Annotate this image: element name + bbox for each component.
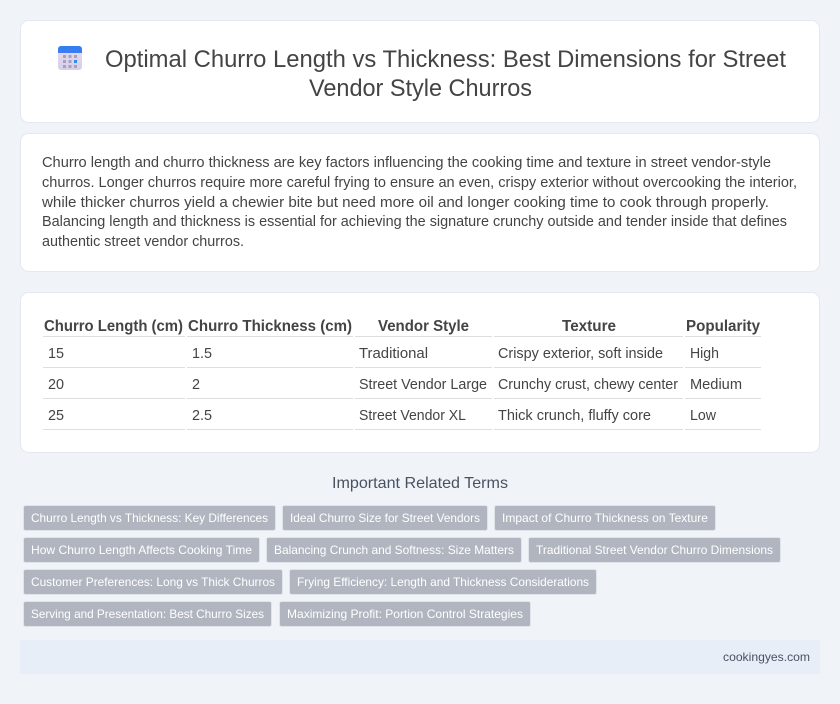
table row: 20 cm: 20 xyxy=(48,377,64,393)
table row: 15 cm: Crispy exterior, soft inside xyxy=(498,346,663,362)
tag list: related terms: Churro Length vs Thickness: Key Differences xyxy=(31,511,268,525)
panel: description xyxy=(20,134,820,272)
table row: 15 cm xyxy=(48,346,719,362)
panel: table xyxy=(20,292,820,452)
heading: related terms: Important Related Terms xyxy=(332,475,508,492)
footer xyxy=(20,640,820,674)
text block: intro paragraph: churros. Longer churros require more careful frying to ensure an even, crispy exterior without overcooking the interior, xyxy=(42,175,797,191)
table row: 25 cm: Low xyxy=(690,408,717,424)
table row: 20 cm xyxy=(48,377,742,393)
text block: intro paragraph xyxy=(41,155,797,250)
panel: header xyxy=(20,20,820,122)
tag list: related terms xyxy=(24,506,780,626)
table row: 20 cm: Street Vendor Large xyxy=(359,377,487,393)
footer: cookingyes.com xyxy=(723,650,810,664)
table header row: Churro Length (cm) xyxy=(44,318,183,335)
tag list: related terms: Frying Efficiency: Length and Thickness Considerations xyxy=(297,575,589,589)
table row: 25 cm: Thick crunch, fluffy core xyxy=(498,408,651,424)
table header row xyxy=(44,318,760,335)
table row: 15 cm: 15 xyxy=(48,346,64,362)
table row: 25 cm: Street Vendor XL xyxy=(359,408,466,424)
table row: 25 cm: 25 xyxy=(48,408,64,424)
text block: intro paragraph: Balancing length and thickness is essential for achieving the signature crunchy outside and tender inside that defines xyxy=(42,214,787,230)
text block: intro paragraph: while thicker churros yield a chewier bite but need more oil and longer cooking time to cook through properly. xyxy=(41,195,769,211)
table row: 15 cm: 1.5 xyxy=(192,346,212,362)
text block: intro paragraph: authentic street vendor churros. xyxy=(42,234,244,250)
title: Vendor Style Churros xyxy=(309,75,532,102)
text block: intro paragraph: Churro length and churro thickness are key factors influencing the cooking time and texture in street vendor-style xyxy=(42,155,771,171)
tag list: related terms: Maximizing Profit: Portion Control Strategies xyxy=(287,607,523,621)
table row: 25 cm: 2.5 xyxy=(192,408,212,424)
table row: 20 cm: 2 xyxy=(192,377,200,393)
table header row: Texture xyxy=(562,318,616,335)
tag list: related terms: Impact of Churro Thickness on Texture xyxy=(502,511,708,525)
tag list: related terms: Ideal Churro Size for Street Vendors xyxy=(290,511,480,525)
tag list: related terms: Balancing Crunch and Softness: Size Matters xyxy=(274,543,514,557)
table row: 15 cm: Traditional xyxy=(359,346,428,362)
tag list: related terms: Customer Preferences: Long vs Thick Churros xyxy=(31,575,275,589)
title xyxy=(105,46,786,102)
tag list: related terms: Traditional Street Vendor Churro Dimensions xyxy=(536,543,773,557)
table row: 25 cm xyxy=(48,408,717,424)
table header row: Churro Thickness (cm) xyxy=(188,318,352,335)
tag list: related terms: Serving and Presentation: Best Churro Sizes xyxy=(31,607,264,621)
table row: 15 cm: High xyxy=(690,346,719,362)
table row: 20 cm: Medium xyxy=(690,377,742,393)
table row: 20 cm: Crunchy crust, chewy center xyxy=(498,377,678,393)
icon: calendar xyxy=(58,46,82,70)
table header row: Vendor Style xyxy=(378,318,469,335)
tag list: related terms: How Churro Length Affects Cooking Time xyxy=(31,543,252,557)
table header row: Popularity xyxy=(686,318,760,335)
title: Optimal Churro Length vs Thickness: Best Dimensions for Street xyxy=(105,46,786,73)
